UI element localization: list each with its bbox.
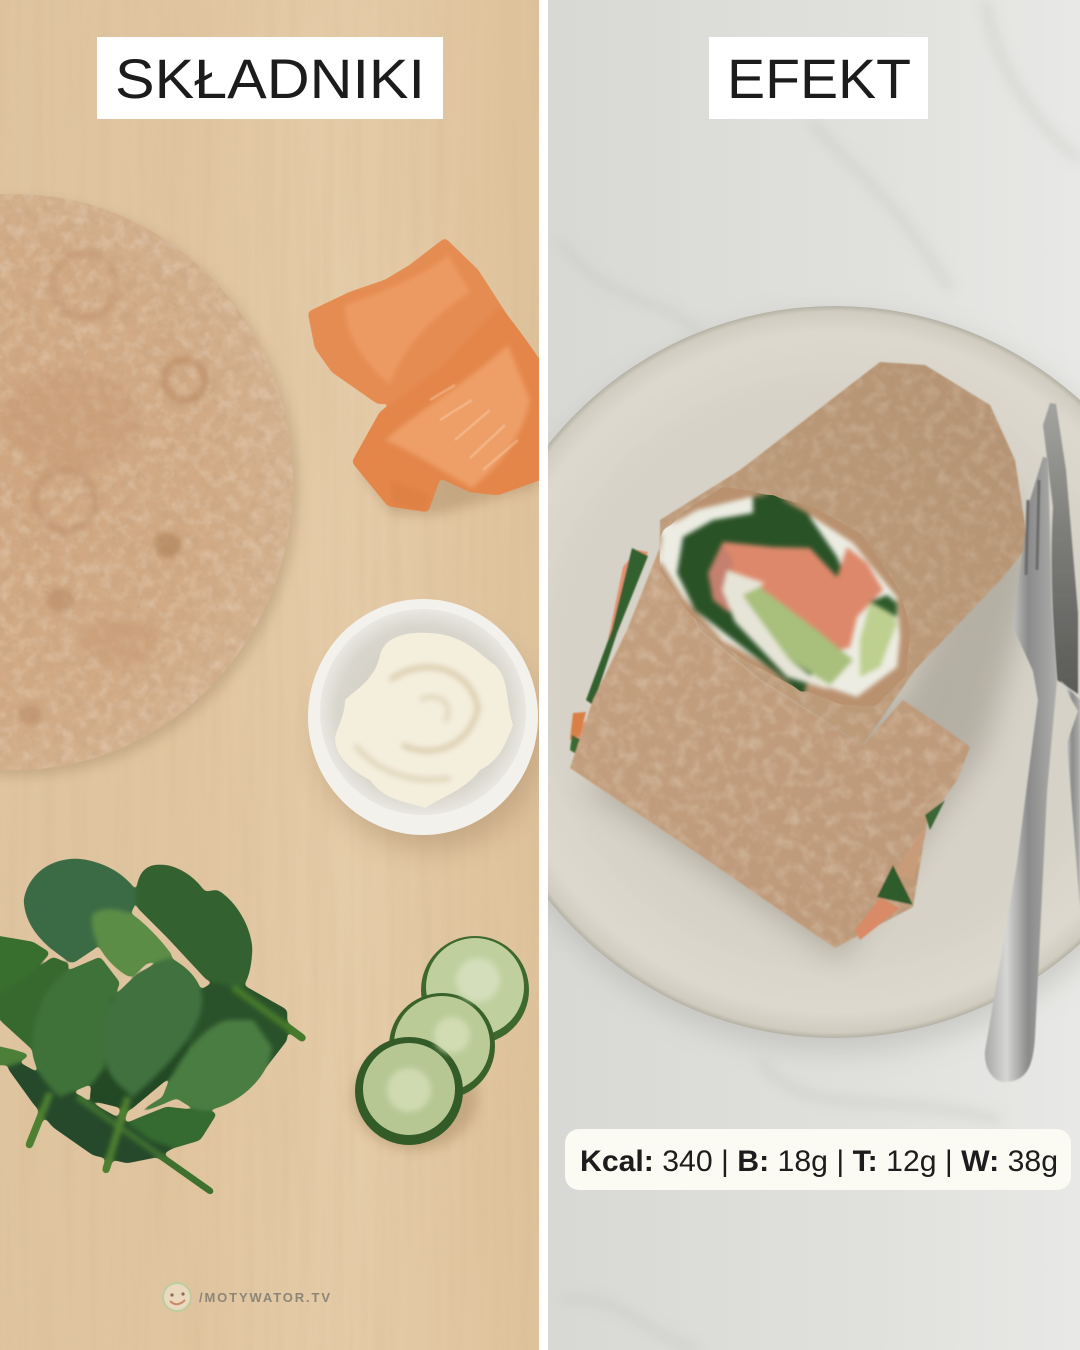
watermark: motywator.tv	[163, 1283, 330, 1311]
ingredient: spinach leaves	[0, 859, 305, 1193]
ingredient: bowl of cream cheese	[308, 599, 542, 850]
heading: efekt: EFEKT	[727, 47, 911, 110]
wrap: lower half	[565, 540, 975, 955]
nutrition facts bar	[565, 1129, 1071, 1190]
panel: składniki (wood board)	[0, 0, 545, 1350]
nutrition facts bar: Kcal: 340 | B: 18g | T: 12g | W: 38g	[580, 1145, 1058, 1178]
watermark: motywator.tv: /MOTYWATOR.TV	[199, 1290, 330, 1305]
wrap shadow	[580, 480, 1040, 960]
ingredient: tortilla	[0, 190, 300, 776]
wrap: upper half	[655, 360, 1030, 750]
cutlery: fork	[985, 457, 1057, 1082]
panel: efekt (marble surface)	[548, 0, 1080, 1350]
wrap: filling cross-section	[660, 487, 910, 706]
ingredient: cucumber slices	[353, 936, 529, 1150]
heading: efekt	[709, 37, 928, 119]
heading: składniki	[97, 37, 443, 119]
ingredient: smoked salmon	[308, 238, 545, 514]
cutlery: knife	[1043, 403, 1080, 908]
plate	[548, 306, 1080, 1058]
heading: składniki: SKŁADNIKI	[115, 47, 425, 110]
